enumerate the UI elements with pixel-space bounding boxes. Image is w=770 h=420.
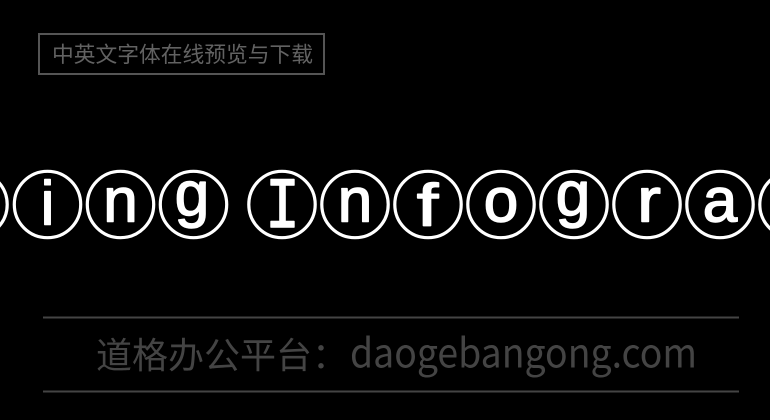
letter circle: n: [322, 166, 388, 238]
letter circle: o: o: [484, 166, 518, 236]
top badge: site label: 中英文字体在线预览与下载: [52, 42, 313, 67]
letter circle: n: [87, 166, 154, 238]
letter circle: o: [468, 166, 534, 238]
letter circle: r: r: [637, 167, 661, 235]
letter circle: g: [160, 160, 227, 238]
footer: site name and URL: daogebangong.com: [350, 322, 697, 380]
letter circle: g: g: [175, 160, 209, 229]
footer: site name and URL: [43, 318, 739, 392]
title: circled letters: [0, 160, 770, 249]
letter circle: n: n: [103, 166, 138, 236]
letter circle: i: i: [41, 170, 54, 238]
letter circle: g: g: [556, 160, 590, 229]
letter circle: cropped left: [0, 171, 7, 238]
letter circle: I: [249, 167, 315, 249]
letter circle: g: [541, 160, 607, 238]
letter circle: a: a: [703, 166, 738, 236]
letter circle: f: [395, 171, 461, 238]
letter circle: f: f: [417, 171, 439, 238]
letter circle: r: [614, 167, 680, 238]
letter circle: cropped right: [760, 171, 770, 238]
letter circle: i: [14, 170, 81, 238]
top badge: site label: [39, 34, 324, 74]
footer: site name and URL: 道格办公平台：: [96, 335, 348, 376]
letter circle: n: n: [338, 166, 372, 236]
letter circle: I: I: [265, 167, 300, 249]
letter circle: a: [687, 166, 753, 238]
